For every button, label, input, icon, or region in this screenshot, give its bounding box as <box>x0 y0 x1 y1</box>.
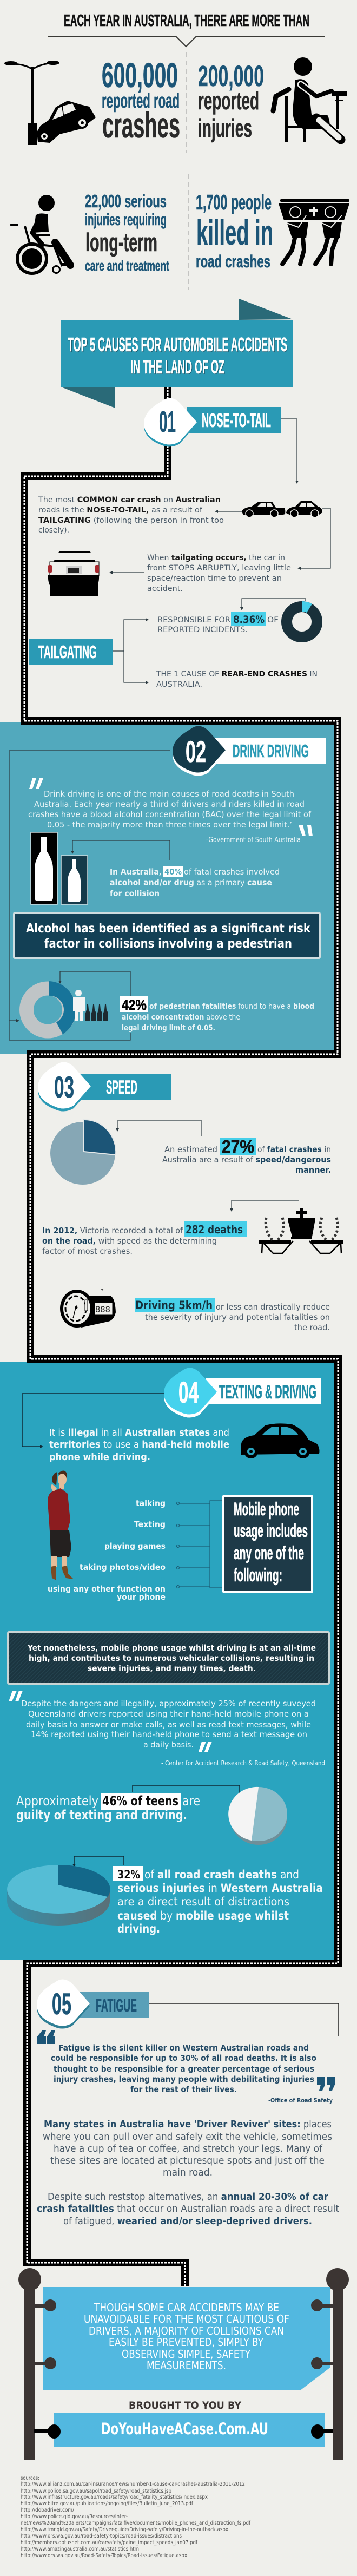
text: 282 deaths: factor of most crashes. <box>42 1246 133 1256</box>
section header: 05 fatigue: FATIGUE <box>96 1995 137 2015</box>
stat: 22,000 serious injuries: long-term <box>85 228 157 257</box>
stat: 600,000 crashes: reported road <box>102 90 180 113</box>
text: 32 percent of deaths: driving. <box>117 1922 160 1935</box>
text: 42 percent pedestrian fatalities: legal driving limit of 0.05. <box>122 1024 215 1033</box>
text: driver reviver sites: where you can pull over and safely exit the vehicle, sometimes <box>43 2131 332 2143</box>
list: mobile phone usage items <box>48 1499 166 1602</box>
text: driving 5km/h: or less can drastically reduce <box>216 1302 330 1312</box>
callout: alcohol risk factor: factor in collisions involving a pedestrian <box>44 937 292 951</box>
text: driver reviver sites: Many states in Australia have 'Driver Reviver' sites: places <box>44 2119 332 2130</box>
arrow: stat to bottles <box>71 840 170 860</box>
text: driver reviver sites: have a cup of tea or coffee, and stretch your legs. Many of <box>54 2143 323 2154</box>
text: 46 percent of teens: Approximately <box>16 1793 98 1809</box>
sources list: http://www.amazingaustralia.com.au/statistics.htm <box>21 2546 139 2552</box>
stat: 600,000 crashes: 600,000 <box>102 56 178 95</box>
sources list: http://www.ors.wa.gov.au/Road-Safety-Topics/Road-Issues/Fatigue.aspx <box>21 2553 187 2559</box>
text: responsible for 8.36 percent: REPORTED INCIDENTS. <box>157 626 248 634</box>
quote: office of road safety: -Office of Road Safety <box>268 2097 333 2104</box>
section header: 02 drink driving: 02 <box>186 734 206 768</box>
label: tailgating <box>29 639 113 665</box>
icon: rear view of car <box>48 551 99 596</box>
text: illegal to use phone: phone while driving. <box>49 1451 150 1463</box>
text: 42 percent pedestrian fatalities: alcohol concentration above the <box>122 1013 240 1022</box>
connector: items to usage box <box>176 1501 222 1588</box>
text: 32 percent of deaths: 32% <box>117 1868 140 1881</box>
text: 27 percent of fatal crashes <box>162 1136 331 1175</box>
quote: office of road safety: injury crashes, leaving many people with debilitating injuries <box>54 2074 314 2084</box>
section header: 01 nose-to-tail <box>144 398 281 447</box>
text: 32 percent of deaths: are a direct result of distractions <box>117 1895 289 1908</box>
text: most common crash: TAILGATING (following the person in front too <box>38 516 224 525</box>
quote: government of south australia: 0.05 - the majority more than three times over the legal limit.’ <box>47 820 292 830</box>
callout: mobile phone usage: Mobile phone <box>234 1499 299 1520</box>
banner heading: IN THE LAND OF OZ <box>130 357 224 378</box>
icon: bottle short <box>61 856 88 904</box>
callout: all-time high: Yet nonetheless, mobile phone usage whilst driving is at an all-time <box>27 1643 316 1653</box>
text: when tailgating occurs <box>147 554 291 593</box>
list: mobile phone usage items: your phone <box>117 1592 166 1602</box>
sources list: net/news%20and%20alerts/campaigns/fatalfive/documents/mobile_phones_and_distraction_fs.pdf <box>21 2520 251 2526</box>
text: 40 percent of fatal crashes: 40% <box>164 867 182 877</box>
text: when tailgating occurs: When tailgating occurs, the car in <box>147 554 285 562</box>
callout: all-time high: severe injuries, and many times, death. <box>88 1664 256 1673</box>
arrow: stat to 3d pie <box>72 1856 124 1867</box>
text: reststop alternatives: Despite such reststop alternatives, an annual 20-30% of car <box>48 2191 328 2203</box>
section header: 05 fatigue: 05 <box>52 1987 71 2021</box>
text: 27 percent of fatal crashes: Australia are a result of speed/dangerous <box>162 1155 331 1165</box>
closing message text: UNAVOIDABLE FOR THE MOST CAUTIOUS OF <box>84 2312 289 2325</box>
arrows: tailgating branches <box>113 618 149 684</box>
icon: funeral urn and wreaths <box>259 1208 343 1253</box>
quote: centre for accident research: daily basis to answer or make calls, as well as read text messages, while <box>26 1720 311 1730</box>
text: 40 percent of fatal crashes: for collision <box>110 889 160 898</box>
text: reststop alternatives: of fatigued, wearied and/or sleep-deprived drivers. <box>63 2216 312 2227</box>
sources list: http://www.infrastructure.gov.au/roads/safety/road_fatality_statistics/index.aspx <box>21 2494 208 2500</box>
arrow: stat to pie <box>116 1121 202 1136</box>
sources list: http://www.ors.wa.gov.au/road-safety-topics/road-issues/distractions <box>21 2533 182 2539</box>
sources list: http://www.police.qld.gov.au/Resources/Inter- <box>21 2514 128 2520</box>
text: 282 deaths: on the road, with speed as the determining <box>42 1236 217 1246</box>
stat: 22,000 serious injuries: 22,000 serious <box>85 191 167 211</box>
section header: 01 nose-to-tail: 01 <box>159 405 176 438</box>
sources list: http://members.optusnet.com.au/carsafety/paine_impact_speeds_jan07.pdf <box>21 2540 198 2546</box>
arrow: pie to teens stat <box>133 1785 240 1793</box>
text: driving 5km/h: the road. <box>294 1323 330 1332</box>
text: 32 percent of deaths: of all road crash deaths and <box>144 1868 299 1881</box>
text: responsible for 8.36 percent: OF <box>267 616 279 625</box>
quote: office of road safety: for the rest of their lives. <box>130 2085 237 2094</box>
icon: injured person sitting <box>273 57 347 142</box>
callout: all-time high: high, and contributes to numerous vehicular collisions, resulting in <box>29 1653 314 1663</box>
chart: 8.36 percent donut <box>287 601 317 637</box>
callout: mobile phone usage <box>223 1496 312 1592</box>
quote: centre for accident research: a daily basis. <box>143 1740 194 1750</box>
text: 32 percent of deaths: caused by mobile usage whilst <box>117 1909 289 1922</box>
stat: 600,000 crashes <box>102 56 180 145</box>
icon: woman on phone <box>48 1470 74 1580</box>
arrow: donut to stat <box>240 599 306 610</box>
quote: government of south australia: -Government of South Australia <box>206 836 301 844</box>
text: the 1 cause of rear-end crashes: THE 1 CAUSE OF REAR-END CRASHES IN <box>156 670 318 679</box>
callout: mobile phone usage: following: <box>234 1565 282 1586</box>
section header: 03 speed <box>38 1062 171 1112</box>
list: mobile phone usage items: talking <box>136 1499 166 1508</box>
sign: closing message <box>34 2287 333 2390</box>
text: 40 percent of fatal crashes <box>110 866 280 898</box>
text: 27 percent of fatal crashes: An estimated <box>164 1145 217 1154</box>
stat: 22,000 serious injuries: injuries requiring <box>85 210 167 229</box>
text: 27 percent of fatal crashes: of fatal crashes in <box>257 1145 331 1154</box>
arrow: cars to text <box>215 510 242 513</box>
callout: alcohol risk factor <box>14 912 320 958</box>
icon: car silhouette <box>241 1423 319 1458</box>
quote: office of road safety: Fatigue is the silent killer on Western Australian roads and <box>58 2043 309 2053</box>
connector: fatigue frame <box>149 2003 339 2036</box>
text: 46 percent of teens: are <box>182 1793 200 1809</box>
label: tailgating: TAILGATING <box>38 642 97 662</box>
text: 40 percent of fatal crashes: In Australia, <box>110 867 162 877</box>
quote: government of south australia: Drink driving is one of the main causes of road deaths in South <box>44 789 294 799</box>
arrow: text to rear car <box>109 571 144 574</box>
section header: 04 texting and driving <box>164 1368 321 1418</box>
text: driver reviver sites <box>43 2119 332 2178</box>
section header: 02 drink driving <box>173 726 326 776</box>
quote: office of road safety: thought to be responsible for a greater percentage of serious <box>54 2064 314 2074</box>
section header: 03 speed: SPEED <box>106 1077 137 1098</box>
text: illegal to use phone <box>49 1427 229 1463</box>
text: 32 percent of deaths <box>113 1866 323 1935</box>
stat: 1,700 killed: 1,700 people <box>196 191 272 214</box>
text: 40 percent of fatal crashes: of fatal crashes involved <box>184 867 280 877</box>
icon: bottle tall <box>31 832 57 904</box>
icon: person with bottles <box>73 990 108 1021</box>
panel: drink driving background <box>0 722 335 1054</box>
sign: website <box>34 2413 333 2447</box>
text: reststop alternatives <box>37 2191 339 2227</box>
text: when tailgating occurs: front STOPS ABRUPTLY, leaving little <box>147 564 291 573</box>
text: most common crash <box>38 496 224 535</box>
closing message text: EASILY BE PREVENTED, SIMPLY BY <box>109 2336 264 2349</box>
icon: car crashed into lamp post <box>4 61 96 145</box>
section header: 01 nose-to-tail: NOSE-TO-TAIL <box>202 409 271 431</box>
text: 282 deaths <box>42 1221 247 1256</box>
list: mobile phone usage items: Texting <box>134 1520 166 1529</box>
text: 282 deaths: 282 deaths <box>186 1223 243 1236</box>
stat: 200,000 injuries <box>198 60 264 142</box>
text: responsible for 8.36 percent: 8.36% <box>233 614 265 626</box>
stat: 200,000 injuries: 200,000 <box>198 60 264 93</box>
quote: centre for accident research: 14% reported using their hand-held phone to send a text message on <box>31 1730 307 1739</box>
section header: 03 speed: 03 <box>54 1070 74 1104</box>
connector: drink driving frame <box>9 751 170 1040</box>
text: 46 percent of teens: 46% of teens <box>102 1793 178 1809</box>
text: driving 5km/h <box>135 1298 330 1332</box>
sources list: http://dobadriver.com/ <box>21 2507 75 2513</box>
quote: government of south australia: crashes have a blood alcohol concentration (BAC) over the legal limit of <box>28 810 312 819</box>
quote: centre for accident research: Despite the dangers and illegality, approximately 25% of recently suveyed <box>21 1699 316 1708</box>
quote: office of road safety <box>37 2030 335 2104</box>
callout: all-time high <box>8 1632 329 1684</box>
text: responsible for 8.36 percent: RESPONSIBLE FOR <box>157 616 230 625</box>
arrow: urn to stat <box>230 1200 299 1212</box>
connector: texting frame <box>22 1394 164 1448</box>
text: most common crash: The most COMMON car crash on Australian <box>38 496 221 504</box>
text: 42 percent pedestrian fatalities: of pedestrian fatalities found to have a blood <box>149 1002 314 1011</box>
sources list: sources: <box>21 2475 39 2481</box>
text: 40 percent of fatal crashes: alcohol and/or drug as a primary cause <box>110 878 272 888</box>
chart: 46 percent pie <box>228 1787 287 1845</box>
icon: pickup and sedan tailgating <box>242 501 322 517</box>
panel: texting and driving background <box>0 1362 335 1960</box>
text: the 1 cause of rear-end crashes: AUSTRALIA. <box>156 680 202 689</box>
sources list: http://www.allianz.com.au/car-insurance/news/number-1-cause-car-crashes-australia-2011-2012 <box>21 2481 245 2487</box>
icon: wheelchair user <box>10 195 72 275</box>
list: mobile phone usage items: playing games <box>104 1541 166 1551</box>
closing message text <box>84 2301 289 2372</box>
icon: speedometer: 888 <box>95 1304 110 1315</box>
text: 282 deaths: In 2012, Victoria recorded a total of <box>42 1226 183 1236</box>
stat: 22,000 serious injuries <box>85 191 169 274</box>
text: driver reviver sites: main road. <box>163 2167 213 2178</box>
stat: 1,700 killed: killed in <box>196 213 273 252</box>
stat: 200,000 injuries: injuries <box>198 114 252 142</box>
text: 46 percent of teens <box>16 1793 200 1823</box>
text: illegal to use phone: It is illegal in all Australian states and <box>49 1427 229 1438</box>
banner heading <box>68 333 287 378</box>
title chevron rule <box>48 36 325 47</box>
text: most common crash: roads is the NOSE-TO-TAIL, as a result of <box>38 506 203 515</box>
text: driver reviver sites: these sites are located at picturesque spots and just off the <box>50 2155 325 2166</box>
chart: 42 percent donut <box>27 981 76 1034</box>
stat: 1,700 killed <box>196 191 273 271</box>
arrow: cars to tailgating text <box>298 508 330 570</box>
text: 42 percent pedestrian fatalities <box>120 996 314 1033</box>
text: 46 percent of teens: guilty of texting and driving. <box>16 1808 187 1823</box>
icon: speedometer <box>60 1289 116 1328</box>
text: when tailgating occurs: accident. <box>147 584 183 593</box>
text: driving 5km/h: Driving 5km/h <box>135 1299 213 1312</box>
text: driving 5km/h: the severity of injury and potential fatalities on <box>145 1312 330 1322</box>
text: when tailgating occurs: space/reaction time to prevent an <box>147 574 282 583</box>
quote: centre for accident research <box>9 1691 325 1767</box>
quote: centre for accident research: Queensland drivers reported using their hand-held mobile phone on a <box>28 1709 309 1719</box>
closing message text: DRIVERS, A MAJORITY OF COLLISIONS CAN <box>89 2324 284 2337</box>
text: responsible for 8.36 percent <box>157 612 279 634</box>
stat: 22,000 serious injuries: care and treatment <box>85 258 169 274</box>
sources list: http://www.tmr.qld.gov.au/Safety/Driver-guide/Driving-safely/Driving-in-the-outback.aspx <box>21 2527 228 2533</box>
sign: website: DoYouHaveACase.Com.AU <box>101 2420 268 2438</box>
closing message text: OBSERVING SIMPLE, SAFETY <box>122 2348 251 2361</box>
chart: 27 percent pie <box>50 1120 116 1185</box>
stat: 1,700 killed: road crashes <box>196 252 270 271</box>
sources list: http://www.police.sa.gov.au/sapol/road_safety/road_statistics.jsp <box>21 2488 171 2494</box>
text: most common crash: closely). <box>38 526 69 535</box>
callout: alcohol risk factor: Alcohol has been identified as a significant risk <box>26 922 311 936</box>
closing message text: THOUGH SOME CAR ACCIDENTS MAY BE <box>94 2301 279 2314</box>
sources list <box>21 2475 251 2559</box>
icon: pallbearers with coffin <box>279 199 349 264</box>
text: 27 percent of fatal crashes: manner. <box>295 1165 331 1175</box>
arrow: header to cars <box>281 419 299 484</box>
text: reststop alternatives: crash fatalities that occur on Australian roads are a direct result <box>37 2203 339 2214</box>
sign posts <box>18 2268 349 2460</box>
text: 32 percent of deaths: serious injuries in Western Australia <box>117 1882 323 1895</box>
list: mobile phone usage items: taking photos/video <box>80 1562 166 1572</box>
road connector <box>24 387 338 2286</box>
section header: 04 texting and driving: 04 <box>178 1375 199 1409</box>
quote: office of road safety: could be responsible for up to 30% of all road deaths. It is also <box>51 2053 316 2063</box>
stat: 200,000 injuries: reported <box>198 87 259 115</box>
text: 27 percent of fatal crashes: 27% <box>222 1136 254 1156</box>
section header: 05 fatigue <box>37 1979 149 2029</box>
chart: 32 percent 3d pie <box>7 1865 110 1926</box>
stat: 600,000 crashes: crashes <box>102 105 180 145</box>
list: mobile phone usage items: using any other function on <box>48 1584 166 1594</box>
callout: mobile phone usage: any one of the <box>234 1543 304 1563</box>
quote: government of south australia: Australia. Each year nearly a third of drivers and riders killed in road <box>34 799 305 809</box>
quote: government of south australia <box>28 778 313 844</box>
text: the 1 cause of rear-end crashes <box>156 670 318 689</box>
text: illegal to use phone: territories to use a hand-held mobile <box>49 1439 229 1450</box>
quote: centre for accident research: - Center for Accident Research & Road Safety, Queensland <box>161 1759 325 1767</box>
banner: top 5 causes <box>61 299 293 408</box>
closing message text: MEASUREMENTS. <box>147 2359 226 2372</box>
heading: brought to you by: BROUGHT TO YOU BY <box>129 2400 241 2411</box>
text: 42 percent pedestrian fatalities: 42% <box>122 997 147 1013</box>
sources list: http://www.bitre.gov.au/publications/ongoing/files/Bulletin_June_2013.pdf <box>21 2501 194 2507</box>
